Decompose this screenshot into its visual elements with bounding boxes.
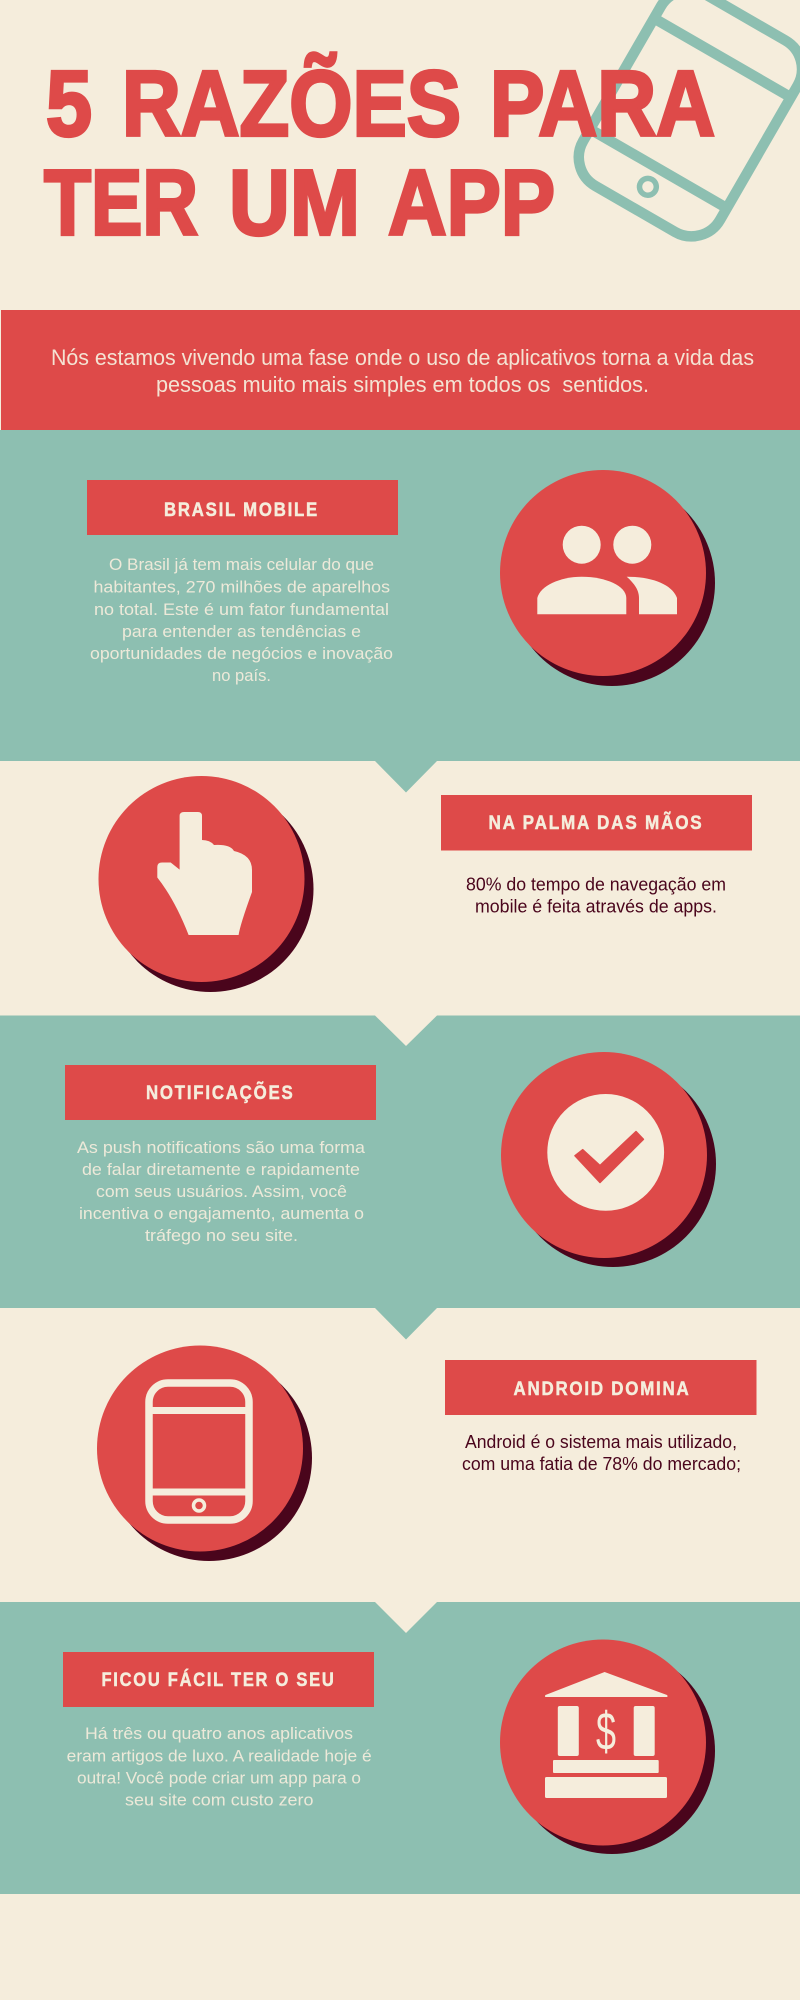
arrow: teal notch pointing down	[375, 761, 437, 792]
title: 5	[46, 52, 92, 156]
body text: Notificações: incentiva o engajamento, aumenta o	[79, 1204, 364, 1223]
body text: Notificações: de falar diretamente e rapidamente	[82, 1160, 360, 1179]
icon: check mark in circle	[501, 1052, 716, 1267]
body text: Na palma das mãos: mobile é feita através de apps.	[475, 896, 717, 916]
icon: tilted phone outline	[567, 0, 800, 248]
body text: Ficou fácil ter o seu: Há três ou quatro anos aplicativos	[85, 1724, 353, 1743]
body text: Na palma das mãos: 80% do tempo de navegação em	[466, 874, 726, 894]
heading box: Na palma das mãos	[441, 795, 752, 850]
icon: bank in circle: $	[596, 1702, 616, 1762]
intro text: pessoas muito mais simples em todos os sentidos.	[156, 372, 649, 397]
title: APP	[388, 151, 555, 255]
body text: Brasil mobile: habitantes, 270 milhões de aparelhos	[94, 578, 390, 596]
body text: Brasil mobile: no total. Este é um fator fundamental	[94, 600, 389, 619]
heading box: Notificações: NOTIFICAÇÕES	[146, 1082, 294, 1104]
panel: Brasil mobile	[0, 430, 800, 761]
body text: Ficou fácil ter o seu: outra! Você pode criar um app para o	[77, 1768, 361, 1788]
title	[44, 52, 715, 255]
body text: Notificações: com seus usuários. Assim, você	[96, 1182, 347, 1201]
body text: Notificações: tráfego no seu site.	[145, 1226, 298, 1245]
panel: Na palma das mãos	[98, 776, 752, 992]
body text: Ficou fácil ter o seu: eram artigos de luxo. A realidade hoje é	[67, 1746, 372, 1766]
heading box: Android domina: ANDROID DOMINA	[514, 1379, 690, 1400]
panel: Ficou fácil ter o seu	[0, 1602, 800, 1894]
body text: Brasil mobile: para entender as tendências e	[122, 622, 361, 641]
heading box: Notificações	[65, 1065, 376, 1120]
body text: Android domina	[462, 1432, 741, 1474]
body text: Ficou fácil ter o seu: seu site com custo zero	[125, 1790, 314, 1810]
body text: Ficou fácil ter o seu	[67, 1724, 372, 1810]
icon: phone in circle	[97, 1346, 312, 1561]
panel: Android domina	[97, 1346, 756, 1561]
heading box: Ficou fácil ter o seu	[63, 1652, 374, 1707]
heading box: Ficou fácil ter o seu: FICOU FÁCIL TER O SEU	[102, 1669, 336, 1691]
heading box: Na palma das mãos: NA PALMA DAS MÃOS	[488, 812, 704, 834]
heading box: Brasil mobile	[87, 480, 398, 535]
body text: Brasil mobile: no país.	[212, 666, 271, 685]
title: PARA	[490, 52, 715, 156]
body text: Brasil mobile: O Brasil já tem mais celular do que	[109, 555, 374, 574]
title: TER	[44, 151, 198, 255]
heading box: Android domina	[445, 1360, 756, 1415]
arrow: cream notch pointing down	[375, 1602, 437, 1633]
icon: pointing hand in circle	[98, 776, 314, 992]
icon: bank in circle	[500, 1640, 715, 1854]
body text: Brasil mobile: oportunidades de negócios e inovação	[90, 644, 393, 663]
title: RAZÕES	[122, 52, 461, 156]
body text: Notificações	[77, 1138, 366, 1245]
body text: Android domina: Android é o sistema mais utilizado,	[465, 1432, 737, 1452]
heading box: Brasil mobile: BRASIL MOBILE	[164, 500, 319, 521]
icon: people in circle	[500, 470, 715, 686]
body text: Brasil mobile	[90, 555, 393, 685]
intro text	[51, 345, 754, 397]
title: UM	[229, 151, 360, 255]
body text: Na palma das mãos	[466, 874, 726, 916]
panel: intro banner	[1, 310, 800, 430]
body text: Notificações: As push notifications são uma forma	[77, 1138, 366, 1157]
body text: Android domina: com uma fatia de 78% do mercado;	[462, 1454, 741, 1474]
arrow: cream notch pointing down	[375, 1016, 437, 1046]
panel: Notificações	[0, 1016, 800, 1308]
intro text: Nós estamos vivendo uma fase onde o uso de aplicativos torna a vida das	[51, 345, 754, 370]
arrow: teal notch pointing down	[375, 1308, 437, 1340]
